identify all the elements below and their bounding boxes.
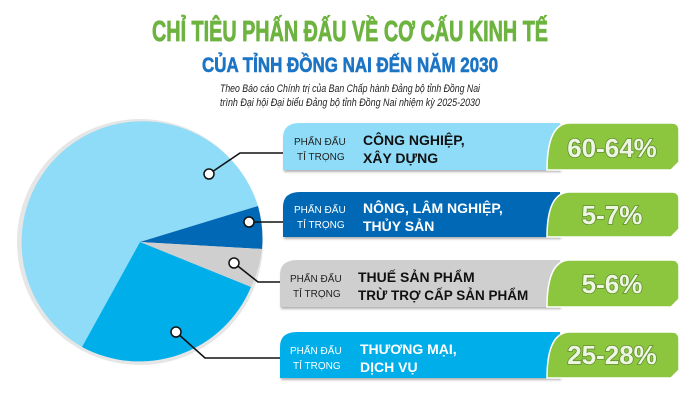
panel: nông lâm nghiệp: TỈ TRỌNG — [297, 218, 345, 231]
panel: thuế sản phẩm: THUẾ SẢN PHẨM — [358, 268, 475, 285]
panel: nông lâm nghiệp: THỦY SẢN — [363, 217, 434, 234]
dots — [171, 169, 254, 337]
panel: thương mại: TỈ TRỌNG — [293, 359, 341, 372]
panel: thương mại — [280, 332, 679, 378]
panel: thuế sản phẩm — [280, 260, 679, 307]
panel: công nghiệp — [283, 123, 679, 170]
connector lines — [176, 153, 284, 358]
panel: thuế sản phẩm: TRỪ TRỢ CẤP SẢN PHẨM — [358, 288, 528, 303]
panel: công nghiệp: CÔNG NGHIỆP, — [363, 131, 465, 148]
panel: thương mại: THƯƠNG MẠI, — [360, 341, 457, 357]
panel: công nghiệp: XÂY DỰNG — [363, 149, 438, 166]
panel: công nghiệp: PHẤN ĐẤU — [294, 135, 346, 148]
panel: nông lâm nghiệp: 5-7% — [582, 200, 642, 230]
panel: thương mại: DỊCH VỤ — [360, 359, 418, 375]
panel: thuế sản phẩm: PHẤN ĐẤU — [290, 272, 342, 285]
panel: thuế sản phẩm: TỈ TRỌNG — [293, 287, 341, 300]
panel: nông lâm nghiệp: NÔNG, LÂM NGHIỆP, — [363, 199, 503, 216]
subtitle: trình Đại hội Đại biểu Đảng bộ tỉnh Đồng Nai nhiệm kỳ 2025-2030 — [220, 97, 481, 109]
panel: nông lâm nghiệp — [283, 192, 679, 237]
panel: công nghiệp: 60-64% — [567, 133, 657, 163]
panel: thương mại: PHẤN ĐẤU — [290, 344, 342, 357]
subtitle: Theo Báo cáo Chính trị của Ban Chấp hành Đảng bộ tỉnh Đồng Nai — [220, 83, 480, 95]
title: CỦA TỈNH ĐỒNG NAI ĐẾN NĂM 2030 — [202, 53, 498, 77]
panel: thuế sản phẩm: 5-6% — [582, 269, 642, 299]
panel: thương mại: 25-28% — [567, 340, 657, 370]
subtitle — [220, 83, 481, 109]
pie chart — [17, 119, 263, 365]
title — [152, 14, 548, 77]
panel: công nghiệp: TỈ TRỌNG — [297, 150, 345, 163]
panel: nông lâm nghiệp: PHẤN ĐẤU — [294, 203, 346, 216]
